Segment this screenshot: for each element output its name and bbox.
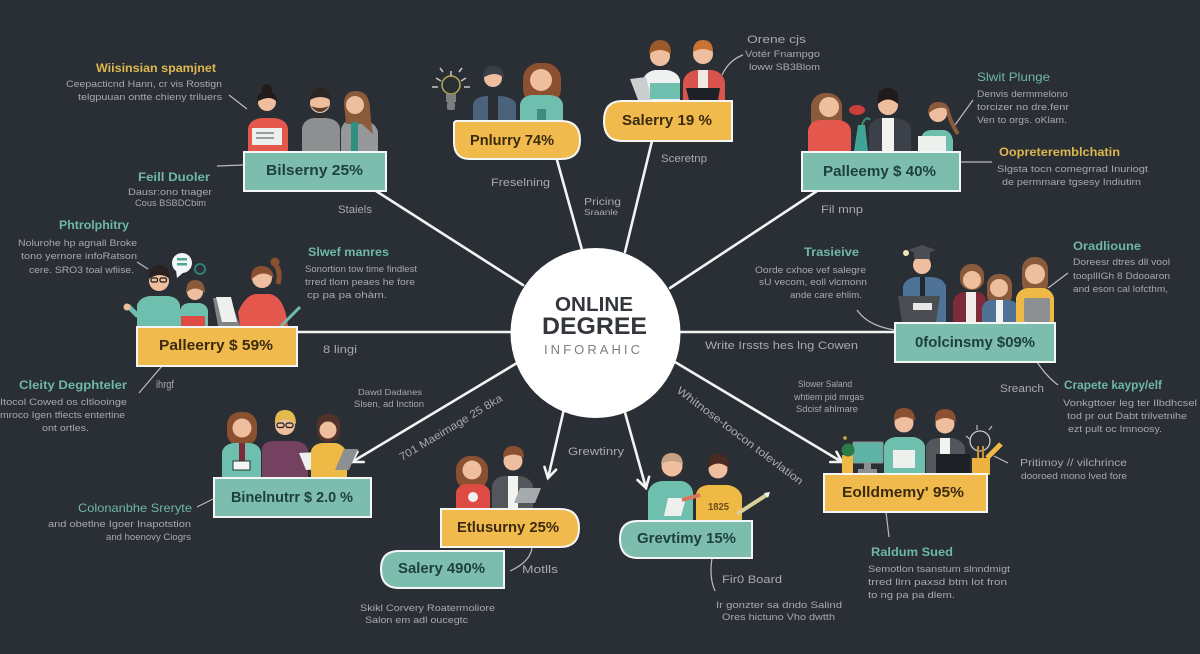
text block: Colonanbhe Sreryte: Colonanbhe Sreryte	[78, 501, 192, 515]
text block: Phtrolphitry: tono yernore infoRatson	[21, 251, 137, 262]
text block: Feill Duoler: Cous BSBDCbim	[135, 198, 206, 209]
text block: Oradlioune: and eson cal lofcthm,	[1073, 284, 1168, 295]
people group 10: 1825	[708, 502, 729, 513]
text block: Cleity Degphteler	[0, 378, 127, 434]
text block: Skikl Corvery	[360, 603, 495, 626]
text block: Slower Saland: Slower Saland	[798, 379, 852, 390]
text block: Wiisinsian spamjnet: telgpuuan ontte chieny triluers	[78, 92, 222, 103]
text block: Crapete kaypy/elf: ezt pult oc Imnoosy.	[1068, 424, 1162, 435]
text block: Orene cjs: loww SB3Blom	[749, 62, 820, 73]
panel: Etlusurny 25%	[441, 446, 579, 547]
panel: Salerry 19%	[604, 40, 732, 141]
label: Etlusurny 25%: Etlusurny 25%	[457, 519, 559, 536]
label: Eolldmemy 95%: Eolldmemy' 95%	[842, 484, 964, 501]
label: Palleemy $40%: Palleemy $ 40%	[823, 163, 936, 180]
text block: Slwit Plunge: Denvis dermmelono	[977, 89, 1068, 100]
text block: Slower Saland	[793, 379, 864, 415]
box: Binelnutrr	[214, 478, 371, 517]
short line labels: ihrgf	[156, 379, 175, 391]
text block: Pritimoy	[1020, 458, 1128, 482]
text block: Feill Duoler	[128, 170, 212, 209]
panel: 0folcinsmy $09%	[895, 245, 1055, 362]
text block: Pricing	[584, 196, 621, 217]
text block: Slwit Plunge: torcizer no dre.fenr	[977, 102, 1069, 113]
text block: Phtrolphitry: Phtrolphitry	[59, 218, 129, 232]
text block: Slwef manres: cp pa pa ohàm.	[307, 290, 387, 301]
text block: Dawd Dadanes	[354, 387, 424, 410]
short line labels: Grewtinry	[568, 446, 625, 458]
label: Palleerry $59%: Palleerry $ 59%	[159, 337, 273, 354]
short line labels: Sceretnp	[661, 153, 707, 165]
text block: Oopreteremblchatin: Oopreteremblchatin	[999, 147, 1120, 159]
people group 4	[808, 88, 958, 151]
text block: Colonanbhe Sreryte: and hoenovy Ciogrs	[106, 532, 191, 543]
text block: Wiisinsian spamjnet	[66, 63, 222, 103]
people group 1	[248, 84, 378, 151]
people group 10	[648, 453, 770, 520]
text block: Cleity Degphteler: Cleity Degphteler	[19, 378, 127, 392]
panel: Salery 490%	[381, 551, 504, 588]
text block: Fir0 Board: Ir gonzter sa dndo Salind	[716, 600, 842, 611]
text block: Oradlioune: Doreesr dtres dll vool	[1073, 257, 1170, 268]
text block: Dawd Dadanes: Dawd Dadanes	[358, 387, 422, 397]
text block: Pricing: Sraanle	[584, 208, 619, 217]
text block: Fir0 Board: Ores hictuno Vho dwtth	[722, 612, 835, 623]
panel: Binelnutrr $2.0%	[214, 410, 371, 517]
text block: Raldum Sued: to ng pa pa dlem.	[868, 590, 955, 601]
text block: Slwit Plunge: Slwit Plunge	[977, 70, 1050, 84]
text block: Colonanbhe Sreryte: and obetlne Igoer Inapotstion	[48, 519, 191, 530]
label: Salery 490%: Salery 490%	[398, 560, 485, 577]
panel: Pnlurry 74%	[432, 63, 580, 159]
text block: Fir0 Board: Fir0 Board	[722, 574, 782, 586]
text block: Oopreteremblchatin: Slgsta tocn comegrrad Inuriogt	[997, 164, 1148, 175]
text block: Slwef manres: trred tlom peaes he fore	[305, 277, 415, 288]
text block: Orene cjs: Votér Fnampgo	[745, 49, 820, 60]
text block: Slwef manres: Slwef manres	[308, 245, 389, 259]
text block: Pritimoy: Pritimoy // vilchrince	[1020, 458, 1128, 469]
text block: Slwef manres: Sonortion tow time findlest	[305, 264, 417, 275]
people group 8	[456, 446, 541, 508]
panel: Palleemy $40%	[802, 88, 960, 191]
panel: Bilserny 25%	[244, 84, 386, 191]
label: 0folcinsmy $09%: 0folcinsmy $09%	[915, 334, 1035, 351]
text block: Oopreteremblchatin: de permmare tgsesy Indiutirn	[1002, 177, 1141, 188]
text block: Oradlioune: Oradlioune	[1073, 239, 1141, 253]
box: Bilserny	[244, 152, 386, 191]
text block: Orene cjs: Orene cjs	[747, 34, 807, 46]
text block: Phtrolphitry	[18, 218, 137, 276]
panel: Palleerry $59%	[124, 253, 300, 366]
central circle: online degree: DEGREE	[542, 313, 647, 340]
box: Eolldmemy	[824, 474, 987, 512]
text block: Phtrolphitry: Nolurohe hp agnall Broke	[18, 238, 137, 249]
text block: Feill Duoler: Feill Duoler	[138, 170, 210, 184]
panel: Grevtimy 15%	[620, 453, 770, 558]
people group 6	[898, 245, 1054, 322]
text block: Trasieive	[755, 245, 867, 301]
text block: Feill Duoler: Dausr:ono tnager	[128, 187, 212, 198]
label: Salerry 19%: Salerry 19 %	[622, 112, 712, 129]
short line labels	[156, 153, 1044, 576]
text block: Raldum Sued: Semotlon tsanstum slnndmigt	[868, 564, 1010, 575]
text block: Cleity Degphteler: ont ortles.	[42, 423, 89, 434]
connector lines	[137, 55, 1068, 591]
rotated label: along right arrow: Whitnose-toocon tolevlation	[674, 385, 805, 488]
text block: Skikl Corvery: Salon em adl oucegtc	[365, 615, 468, 626]
text block: Slower Saland: Sdcisf ahlmare	[796, 404, 858, 415]
box: Grevtimy	[620, 521, 752, 558]
people group 11	[884, 408, 970, 473]
text block: Phtrolphitry: cere. SRO3 toal wfiise.	[29, 265, 134, 276]
short line labels: Sreanch	[1000, 383, 1044, 395]
text block: Slwef manres	[305, 245, 417, 301]
text block: Wiisinsian spamjnet: Wiisinsian spamjnet	[96, 63, 216, 75]
arrows	[352, 362, 842, 488]
text block: Slwit Plunge: Ven to orgs. oKlam.	[977, 115, 1067, 126]
box: Salery	[381, 551, 504, 588]
text block: Trasieive: ande care ehlim.	[790, 290, 862, 301]
text block: Crapete kaypy/elf	[1063, 378, 1197, 435]
text block: Pritimoy: dooroed mono lved fore	[1021, 471, 1127, 482]
box: Salerry	[604, 101, 732, 141]
short line labels: Write Irssts hes lng Cowen	[705, 340, 858, 352]
box: Pnlurry	[454, 121, 580, 159]
people group 5	[124, 253, 300, 327]
text block: Orene cjs	[745, 34, 820, 73]
box: 0folcinsmy	[895, 323, 1055, 362]
text block: Wiisinsian spamjnet: Ceepacticnd Hann, cr vis Rostign	[66, 79, 222, 90]
box: Palleemy	[802, 152, 960, 191]
short line labels: Freselning	[491, 177, 550, 189]
text block: Crapete kaypy/elf: Crapete kaypy/elf	[1064, 378, 1163, 392]
central circle: online degree: INFORAHIC	[544, 342, 640, 357]
text block: Dawd Dadanes: Slsen, ad Inction	[354, 399, 424, 410]
icon: light bulb	[432, 68, 470, 110]
short line labels: 8 lingi	[323, 344, 357, 356]
label: Bilserny 25%: Bilserny 25%	[266, 162, 363, 179]
text block: Cleity Degphteler: Itocol Cowed os cltlooinge	[0, 397, 127, 408]
box: Etlusurny	[441, 509, 579, 547]
text block: Cleity Degphteler: mroco Igen tfiects entertine	[0, 410, 125, 421]
short line labels: Motlls	[522, 564, 559, 576]
label: Pnlurry 74%: Pnlurry 74%	[470, 132, 554, 149]
text block: Trasieive: sU vecom, eoll vlcmonn	[759, 277, 867, 288]
label: Grevtimy 15%: Grevtimy 15%	[637, 530, 736, 547]
text block: Slower Saland: whtiem pid mrgas	[793, 392, 864, 403]
text block: Trasieive: Trasieive	[804, 245, 859, 259]
text block: Oopreteremblchatin	[997, 147, 1148, 188]
text block: Colonanbhe Sreryte	[48, 501, 192, 543]
text block: Pricing: Pricing	[584, 196, 621, 208]
people group 7	[222, 410, 358, 477]
text block: Crapete kaypy/elf: Vonkgttoer leg ter Ilbdhcsel	[1063, 398, 1197, 409]
central circle: online degree: ONLINE	[555, 294, 633, 316]
people group 2	[473, 63, 563, 120]
text block: Trasieive: Oorde cxhoe vef salegre	[755, 265, 866, 276]
text block: Raldum Sued: trred llrn paxsd btm lot fron	[868, 577, 1007, 588]
text block: Slwit Plunge	[977, 70, 1069, 126]
people group 3	[630, 40, 725, 100]
rotated label: along left arrow: 701 Maeimage 25 8ka	[397, 392, 506, 464]
central circle: online degree	[510, 248, 680, 418]
text block: Raldum Sued	[868, 545, 1010, 601]
text block: Oradlioune	[1073, 239, 1170, 295]
text block: Skikl Corvery: Skikl Corvery Roatermoliore	[360, 603, 495, 614]
text block: Raldum Sued: Raldum Sued	[871, 545, 953, 559]
short line labels: Staiels	[338, 204, 372, 216]
box: Palleerry	[137, 327, 297, 366]
short line labels: Fil mnp	[821, 204, 863, 216]
label: Binelnutrr $2.0%: Binelnutrr $ 2.0 %	[231, 489, 353, 506]
desk objects	[842, 425, 1008, 475]
panel: Eolldmemy 95%	[824, 408, 1008, 512]
text block: Oradlioune: toopIlIGh 8 Ddooaron	[1073, 271, 1170, 282]
text block: Crapete kaypy/elf: tod pr out Dabt trilvetnihe	[1067, 411, 1187, 422]
text block: Fir0 Board	[716, 574, 842, 623]
